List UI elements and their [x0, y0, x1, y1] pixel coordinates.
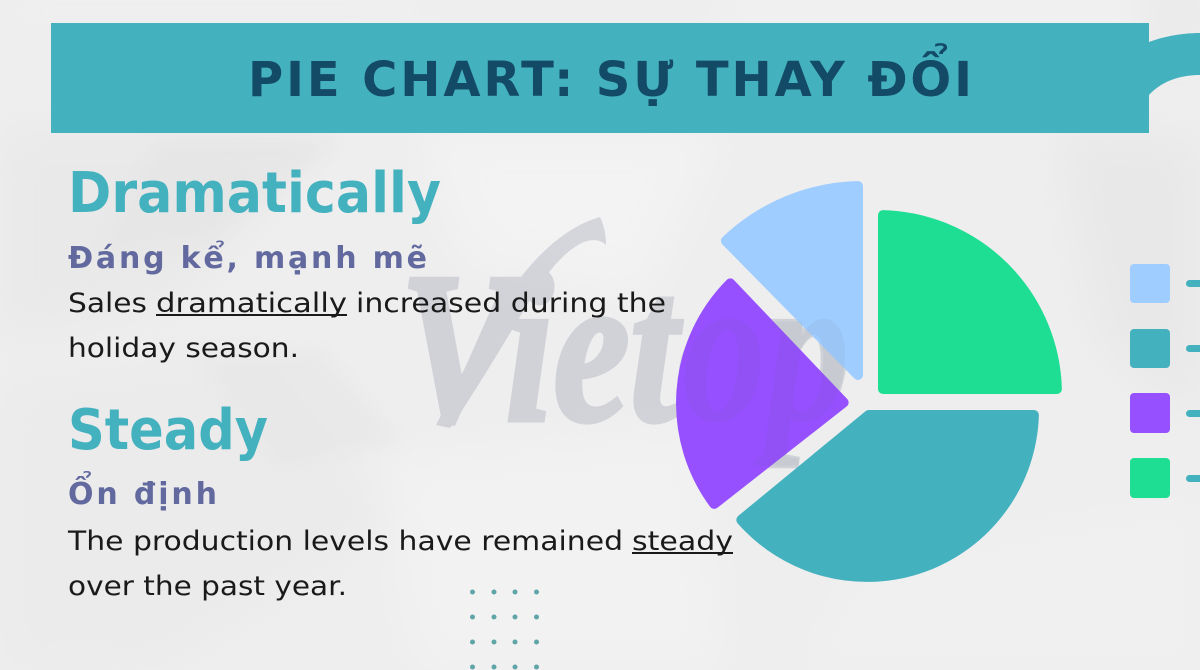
example sentence: dramatically — [156, 288, 347, 319]
legend item: green — [1130, 458, 1200, 498]
title: PIE CHART: SỰ THAY ĐỔI — [248, 43, 972, 108]
example sentence: holiday season. — [68, 333, 299, 364]
example sentence — [68, 288, 666, 364]
pie chart — [681, 186, 1057, 577]
slice: light blue — [726, 186, 858, 375]
header banner — [51, 23, 1149, 133]
text block: Dramatically — [68, 161, 666, 364]
watermark: Vietop — [400, 228, 850, 467]
text block: Steady — [67, 398, 733, 602]
translation: Đáng kể, mạnh mẽ: Đáng kể, mạnh mẽ — [68, 240, 427, 276]
translation: Ổn định: Ổn định — [68, 470, 217, 512]
dot grid decoration — [470, 590, 539, 670]
slice: purple — [681, 283, 844, 504]
heading: Steady: Steady — [68, 398, 268, 463]
example sentence: increased during the — [356, 288, 666, 319]
slice: green — [883, 215, 1057, 389]
heading: Dramatically: Dramatically — [68, 161, 441, 226]
legend item: light blue — [1130, 264, 1200, 303]
legend — [1130, 264, 1200, 498]
watermark overlay on pie: op — [682, 228, 850, 467]
legend item: purple — [1130, 393, 1200, 433]
example sentence: over the past year. — [68, 571, 347, 602]
legend item: teal — [1130, 329, 1200, 368]
example sentence: Sales — [68, 288, 147, 319]
example sentence: steady — [632, 526, 733, 557]
slice: teal — [741, 415, 1034, 577]
example sentence: The production levels have remained — [67, 526, 623, 557]
example sentence — [67, 526, 733, 602]
header hook decoration — [1149, 33, 1200, 95]
